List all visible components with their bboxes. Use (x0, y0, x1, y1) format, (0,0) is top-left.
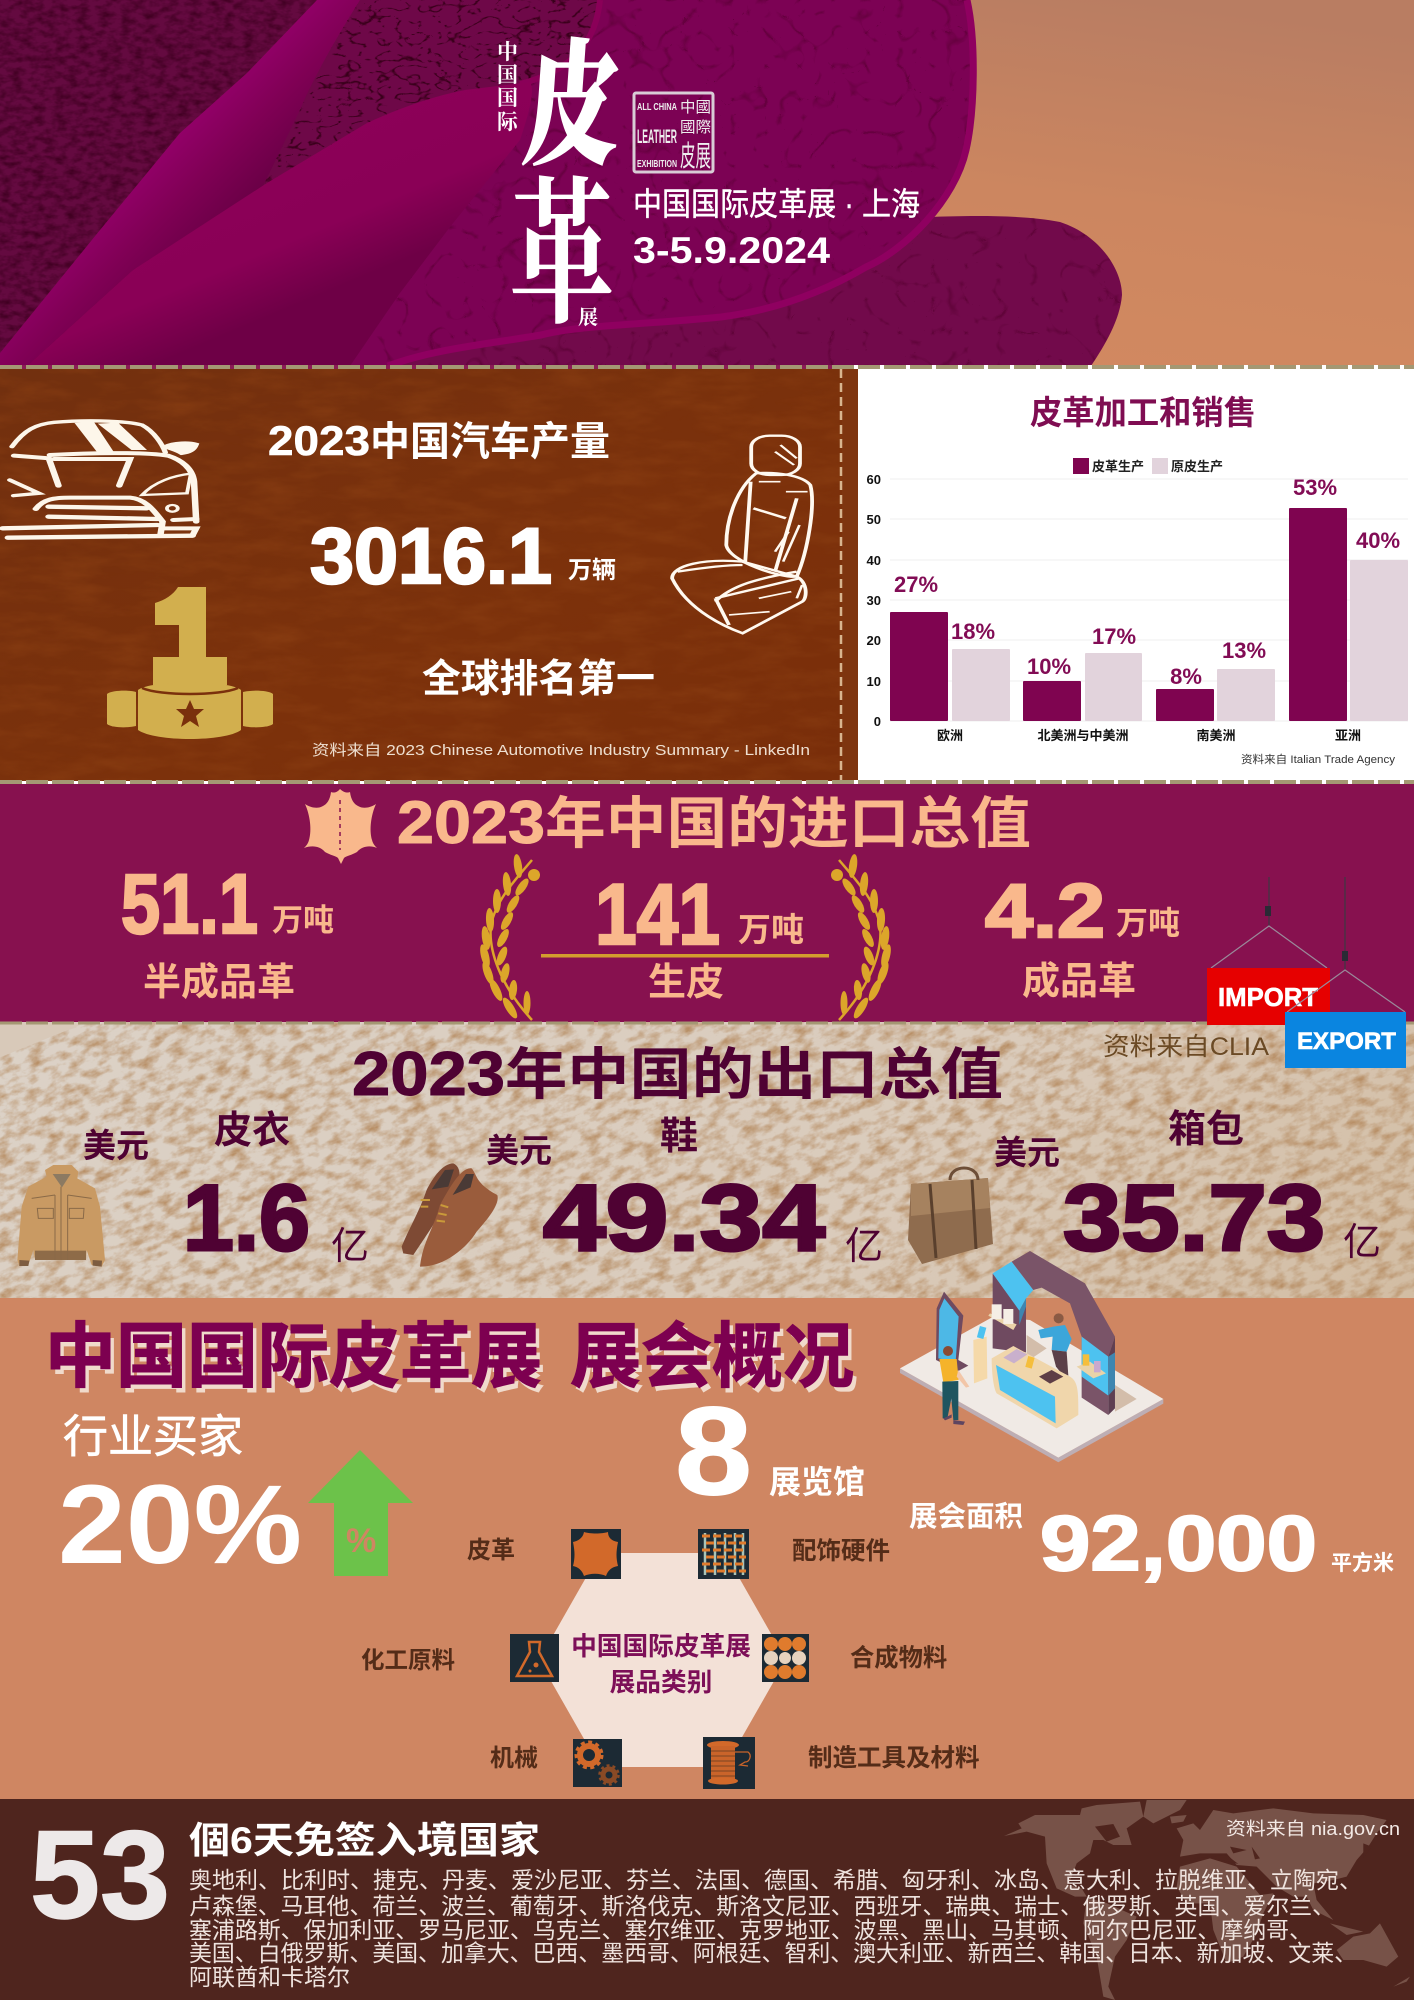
panel: stitching band (0, 365, 1414, 369)
stat: bags: 亿 (1343, 1222, 1381, 1264)
label: hardware: 配饰硬件 (792, 1537, 890, 1565)
logo: calligraphy title: 国 (497, 82, 518, 112)
stat: finished leather: 4.2 (985, 869, 1105, 954)
leather shape: rim (388, 0, 973, 366)
y axis: 0 (874, 714, 881, 729)
stat: semi finished: 半成品革 (143, 962, 295, 1004)
panel: car production (0, 369, 858, 781)
icon: shoes (402, 1163, 498, 1267)
import container (1207, 968, 1330, 1025)
icon: leather hide (304, 789, 377, 864)
icon: growth arrow: % (346, 1522, 376, 1560)
chart source: 资料来自 Italian Trade Agency (1241, 752, 1396, 766)
visa heading: 個6天免签入境国家 (189, 1820, 540, 1861)
stat: finished leather: 成品革 (1022, 961, 1136, 1003)
import title: 2023 (397, 789, 545, 856)
stat: bags (994, 1109, 1381, 1270)
stat: raw hides: 141 (595, 867, 720, 963)
leather shape: upper cracked panel (263, 0, 600, 186)
panel: bar chart leather processing (858, 369, 1414, 781)
illustration: exhibition booth (900, 1251, 1163, 1462)
stat: area: 平方米 (1331, 1551, 1394, 1575)
event date: 3-5.9.2024 (633, 230, 830, 271)
person right (1038, 1313, 1072, 1376)
diagram: product category hexagon (361, 1529, 980, 1789)
stat: shoes (486, 1116, 883, 1270)
bars (890, 508, 1408, 721)
stat: raw hides: 万吨 (738, 911, 804, 948)
map: world (1004, 1800, 1410, 2000)
icon: hardware accessories (698, 1529, 749, 1579)
y axis: 30 (867, 593, 881, 608)
y axis: 50 (867, 512, 881, 527)
stat: leather garments: 亿 (331, 1226, 369, 1268)
y axis: 40 (867, 553, 881, 568)
counter (992, 1346, 1078, 1428)
logo: seal (634, 93, 713, 173)
export container (1285, 1012, 1406, 1068)
export title (352, 1040, 1003, 1109)
logo: calligraphy title (498, 36, 618, 326)
y axis: 20 (867, 633, 881, 648)
logo: calligraphy title: 革 (509, 128, 615, 356)
shelves and products (988, 1313, 1017, 1330)
source: 资料来自CLIA (1103, 1033, 1269, 1061)
leather shape: bright fold (27, 82, 532, 366)
logo: seal: EXHIBITION (637, 159, 677, 170)
label: leather: 皮革 (467, 1537, 515, 1564)
x axis labels: 南美洲 (1196, 728, 1236, 743)
icon: synthetic materials (762, 1634, 809, 1682)
person left (939, 1346, 969, 1425)
logo: seal: 國際 (680, 119, 711, 136)
logo: calligraphy title: 际 (497, 106, 520, 136)
export container: EXPORT (1297, 1028, 1396, 1055)
logo: calligraphy title: 国 (497, 59, 518, 89)
title: car output: 2023 (268, 417, 370, 464)
stat: semi finished: 51.1 (121, 857, 258, 951)
overview title: 展会概况 (570, 1318, 854, 1397)
import title: 年中国的进口总值 (545, 792, 1031, 855)
stat: halls: 8 (675, 1382, 752, 1521)
country list: 奥地利、比利时、捷克、丹麦、爱沙尼亚、芬兰、法国、德国、希腊、匈牙利、冰岛、意大利、拉脱维亚、立陶宛、 (189, 1867, 1362, 1893)
hexagon label: 中国国际皮革展 (571, 1632, 751, 1661)
logo: calligraphy title: 皮 (518, 0, 628, 191)
overview title (45, 1318, 858, 1402)
icon: growth arrow (308, 1450, 413, 1576)
data labels: 8% (1170, 664, 1202, 689)
label: machinery: 机械 (490, 1745, 538, 1772)
data labels (894, 475, 1400, 689)
country list: 阿联酋和卡塔尔 (189, 1964, 350, 1990)
data labels: 27% (894, 572, 938, 597)
legend (1073, 458, 1223, 474)
stat: raw hides: 生皮 (648, 962, 724, 1004)
data labels: 40% (1356, 528, 1400, 553)
stat: trade buyers: 20% (58, 1462, 302, 1587)
stat: trade buyers: 行业买家 (63, 1411, 243, 1462)
country list: 塞浦路斯、保加利亚、罗马尼亚、乌克兰、塞尔维亚、克罗地亚、波黑、黑山、马其顿、阿尔巴尼亚、摩纳哥、 (189, 1917, 1312, 1943)
export title: 2023 (352, 1040, 505, 1109)
icon: car (3, 421, 196, 538)
stat: raw hides (541, 867, 829, 1004)
country list: 美国、白俄罗斯、美国、加拿大、巴西、墨西哥、阿根廷、智利、澳大利亚、新西兰、韩国、日本、新加坡、文莱、 (189, 1940, 1357, 1966)
icon: laurel right (831, 854, 893, 1020)
leather shape: light band (0, 0, 360, 366)
stat: area: 展会面积 (909, 1501, 1023, 1533)
panel: exhibition overview (0, 1251, 1414, 1800)
stat: leather garments: 美元 (83, 1127, 149, 1164)
stat: area (909, 1499, 1394, 1587)
leather shape: textured centre (330, 0, 973, 366)
stat: bags: 箱包 (1168, 1109, 1244, 1151)
icon: chemicals flask (510, 1634, 559, 1682)
data labels: 17% (1092, 624, 1136, 649)
stat: leather garments: 皮衣 (214, 1110, 290, 1152)
icon: laurel left (478, 854, 540, 1020)
data labels: 10% (1027, 654, 1071, 679)
import container: IMPORT (1218, 982, 1318, 1012)
logo: seal: 中國 (680, 99, 711, 116)
podium (973, 1337, 987, 1383)
stat: bags: 35.73 (1063, 1165, 1325, 1270)
title: car output (268, 417, 610, 464)
logo: seal: LEATHER (637, 127, 677, 148)
panel: hero banner (0, 0, 1414, 366)
legend: 皮革生产 (1092, 459, 1144, 474)
event name: 中国国际皮革展 · 上海 (633, 186, 920, 222)
export title: 年中国的出口总值 (505, 1043, 1003, 1106)
country list: 卢森堡、马耳他、荷兰、波兰、葡萄牙、斯洛伐克、斯洛文尼亚、西班牙、瑞典、瑞士、俄罗斯、英国、爱尔兰、 (189, 1893, 1335, 1919)
panel: export totals (0, 1022, 1414, 1298)
data labels: 53% (1293, 475, 1337, 500)
icon: leather (571, 1529, 621, 1579)
stat: finished leather: 万吨 (1116, 905, 1180, 941)
stat: halls: 展览馆 (769, 1464, 865, 1500)
panel: import totals (0, 780, 1414, 1022)
legend: 原皮生产 (1171, 459, 1223, 474)
stat: semi finished (121, 857, 334, 1004)
y axis (867, 472, 881, 729)
stat: shoes: 49.34 (543, 1165, 825, 1270)
stat: semi finished: 万吨 (272, 903, 334, 938)
stat: leather garments: 1.6 (183, 1165, 310, 1270)
overview title: 中国国际皮革展 (49, 1323, 546, 1402)
y axis: 10 (867, 674, 881, 689)
figure: 53: 53 (30, 1806, 170, 1945)
arch (993, 1273, 1026, 1352)
figure: 3016.1: 3016.1 (310, 511, 552, 600)
source: 资料来自 2023 Chinese Automotive Industry Summary - LinkedIn (312, 742, 810, 759)
icon: jacket (17, 1165, 105, 1267)
data labels: 18% (951, 619, 995, 644)
icon: bag (908, 1168, 993, 1264)
y axis: 60 (867, 472, 881, 487)
label: tools and materials: 制造工具及材料 (808, 1744, 980, 1772)
stat: leather garments (83, 1110, 369, 1270)
stat: bags: 美元 (994, 1134, 1060, 1171)
panel: visa free countries (0, 1799, 1414, 2000)
hexagon label (571, 1632, 751, 1697)
unit: 万辆 (568, 557, 616, 584)
chart title: 皮革加工和销售 (1030, 394, 1256, 431)
rank label: 全球排名第一 (422, 658, 655, 701)
label: synthetic: 合成物料 (850, 1645, 947, 1672)
x axis labels (937, 728, 1361, 743)
data labels: 13% (1222, 638, 1266, 663)
x axis labels: 亚洲 (1335, 728, 1361, 743)
stat: shoes: 亿 (845, 1226, 883, 1268)
logo: calligraphy title: 中 (497, 36, 518, 66)
left display screen (936, 1292, 968, 1371)
x axis labels: 欧洲 (937, 728, 963, 743)
icon: trophy number one (107, 587, 273, 739)
logo: seal: ALL CHINA (637, 102, 677, 113)
leather shape: dark left (0, 0, 317, 365)
stat: trade buyers (58, 1411, 302, 1587)
stat: halls (675, 1382, 865, 1521)
label: chemicals: 化工原料 (361, 1647, 455, 1673)
overview title: 中国国际皮革展 (45, 1318, 542, 1397)
icon: car seat (672, 436, 812, 633)
logo: seal: 皮展 (680, 140, 711, 173)
icon: import export containers (1207, 877, 1406, 1068)
import title (397, 789, 1031, 856)
leather shape: bottom lobe (388, 216, 1122, 366)
icon: spool (703, 1737, 755, 1789)
stat: shoes: 鞋 (660, 1116, 698, 1158)
stat: finished leather (985, 869, 1180, 1003)
x axis labels: 北美洲与中美洲 (1037, 728, 1129, 743)
title: car output: 中国汽车产量 (370, 420, 610, 464)
logo: calligraphy title: 展 (578, 301, 598, 330)
hexagon label: 展品类别 (610, 1668, 712, 1697)
stat: shoes: 美元 (486, 1132, 552, 1169)
source: 资料来自 nia.gov.cn (1226, 1819, 1400, 1839)
overview title: 展会概况 (574, 1323, 858, 1402)
country list (189, 1867, 1362, 1990)
stat: area: 92,000 (1040, 1499, 1317, 1587)
icon: machinery gears (573, 1739, 622, 1787)
